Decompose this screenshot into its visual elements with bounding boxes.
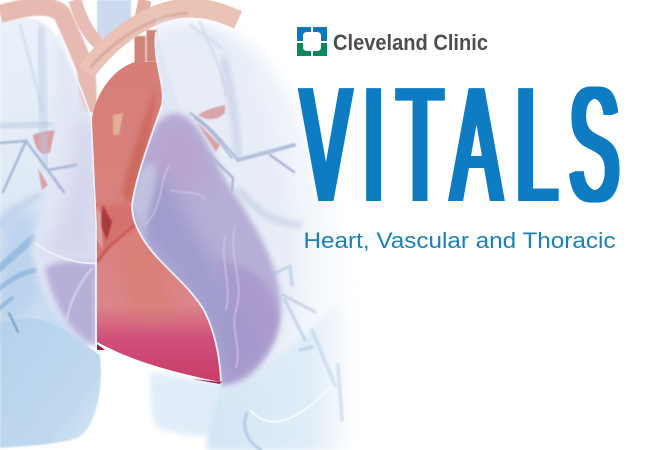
subtitle: Heart, Vascular and Thoracic (304, 228, 616, 253)
lobe lilac right side (215, 260, 278, 382)
lobe outline (132, 32, 221, 381)
aortic arteries (0, 0, 238, 112)
trachea (97, 0, 131, 38)
lobe pale base (133, 16, 258, 390)
lobe pale left rim (132, 164, 156, 240)
lobe lavender body (130, 114, 281, 385)
left upper lavender edge (48, 122, 95, 258)
left lung back (0, 17, 97, 345)
left lung bronchi (0, 25, 76, 225)
heart base shadow (97, 344, 221, 384)
red vessel left (33, 130, 55, 190)
left lung lobe (32, 35, 96, 348)
right lung bronchi (190, 22, 342, 420)
title: VITALS: VITALS (301, 53, 619, 236)
heart (92, 62, 228, 383)
right lung back (140, 24, 360, 450)
lobe blue shade (138, 178, 234, 376)
right lung lobe over heart (132, 16, 286, 388)
left lobe base (32, 35, 96, 348)
wordmark: Cleveland Clinic (333, 30, 488, 55)
lobe solid rim base (156, 34, 160, 58)
icon: cross mark (297, 27, 327, 56)
left crease (66, 268, 92, 325)
left blue bronchi lower (0, 238, 35, 332)
illustration: lungs and heart (0, 0, 360, 450)
lobe pink crown (160, 126, 206, 180)
left purple lower (45, 262, 96, 345)
heart shading (97, 85, 175, 320)
lower lobes (0, 300, 355, 450)
left lung blue haze (0, 205, 40, 325)
logo: Cleveland Clinic (297, 27, 488, 56)
crease lines (145, 165, 239, 368)
left lobe outline (35, 35, 96, 345)
